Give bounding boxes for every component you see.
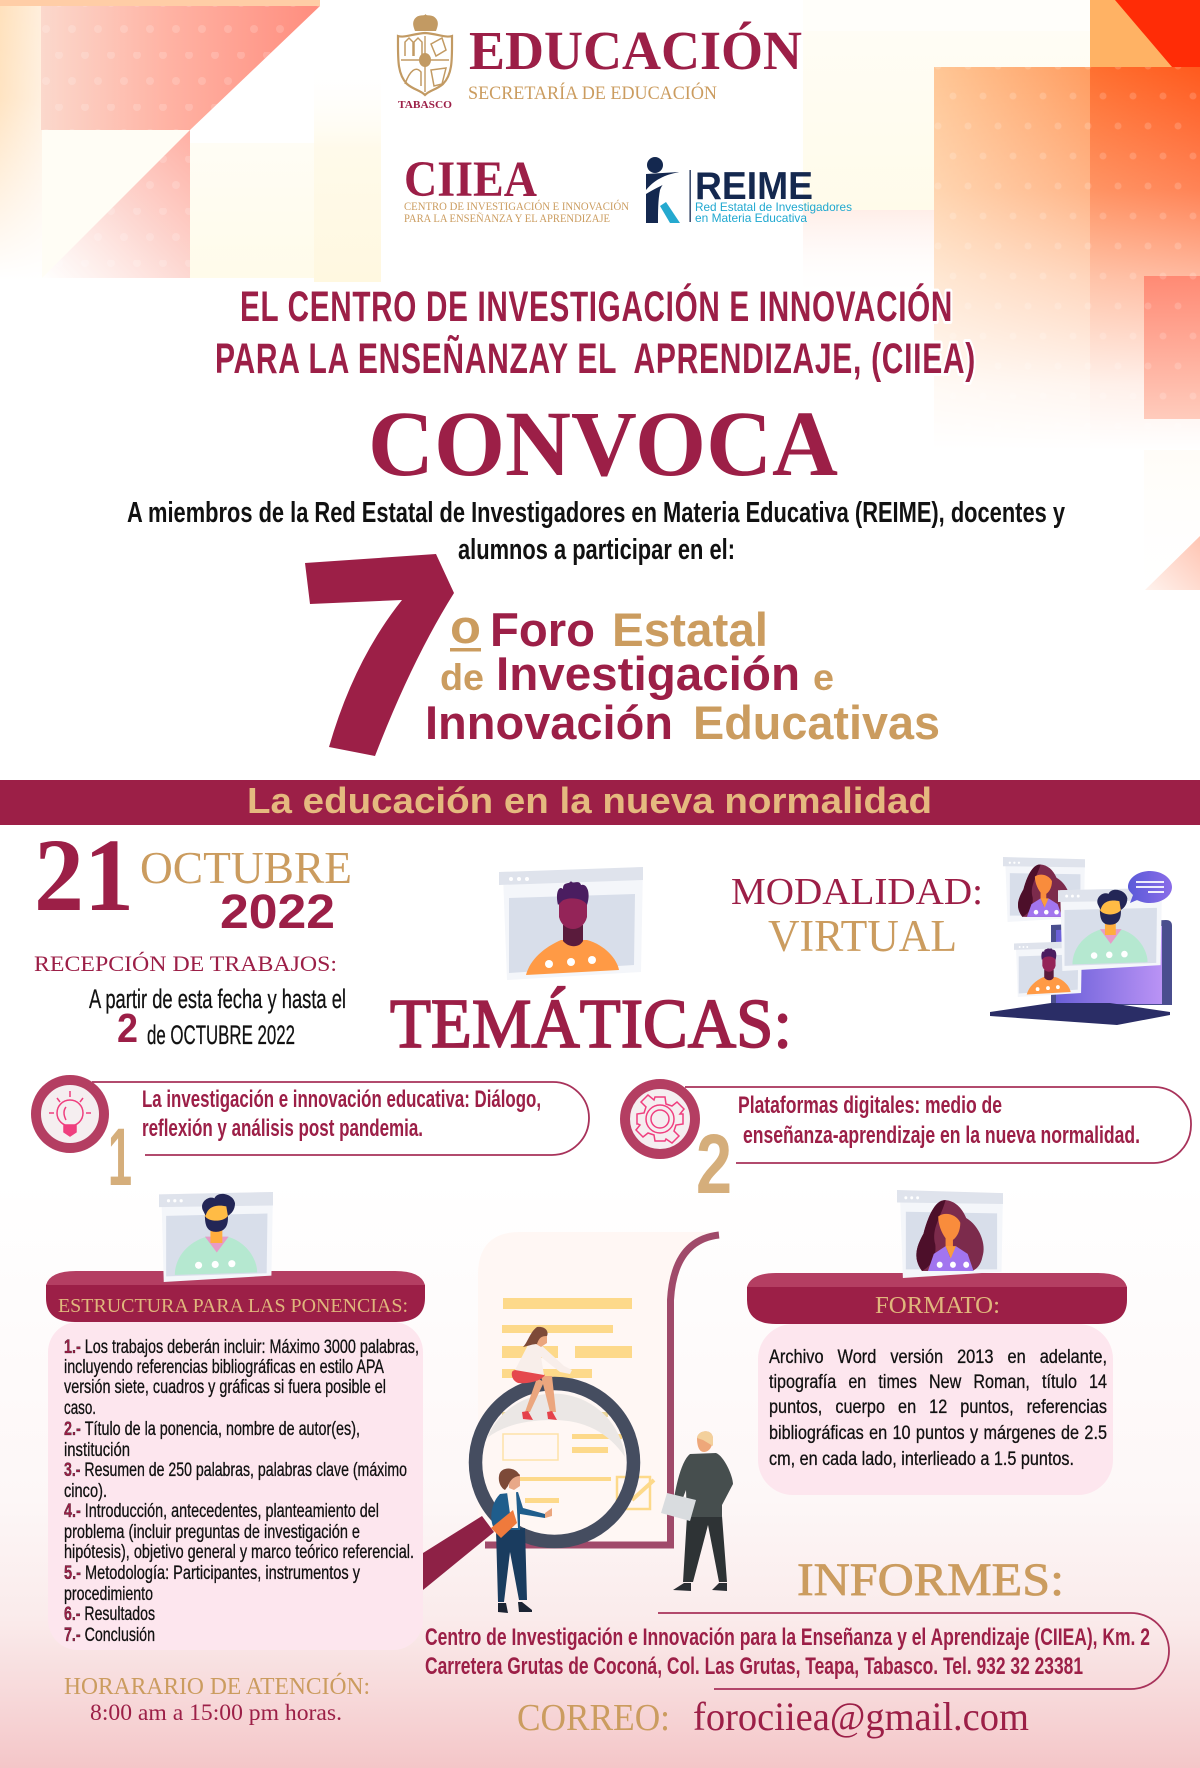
date block [34,818,352,939]
person window above structure banner [159,1192,273,1282]
modality: VIRTUAL [768,911,957,961]
panel: structure list: 7.- Conclusión [64,1625,155,1646]
panel: structure list: problema (incluir preguntas de investigación e [64,1522,360,1543]
topic 1: reflexión y análisis post pandemia. [142,1115,423,1142]
panel: structure list: cinco). [64,1481,107,1502]
topic 2 [625,1084,1191,1211]
big numeral 7 [305,554,454,756]
forum title: Educativas [693,696,940,749]
submission period [34,951,346,1051]
forum title: de [440,657,484,698]
topic 1: La investigación e innovación educativa: Diálogo, [142,1086,541,1113]
date block: OCTUBRE [140,843,352,893]
logo subtitle: SECRETARÍA DE EDUCACIÓN [468,82,717,104]
magnifier lens [476,1384,634,1542]
email [517,1694,1029,1739]
logo: Tabasco crest: TABASCO [398,100,452,111]
theme banner [0,780,1200,825]
title: CONVOCA: CONVOCA [368,393,838,496]
logo: CIIEA: CIIEA [404,152,537,208]
modality [731,871,983,961]
date block: 21 [34,818,134,933]
person: woman sitting [512,1327,572,1420]
document [478,1232,719,1545]
office hours [64,1673,370,1725]
logo: REIME: Red Estatal de Investigadores [695,200,852,214]
invitation text: alumnos a participar en el: [458,534,735,566]
office hours: HORARARIO DE ATENCIÓN: [64,1673,370,1700]
theme banner: La educación en la nueva normalidad [247,780,932,821]
topic 2: 2 [696,1117,732,1211]
illustration: laptop with video call [990,857,1172,1025]
panel: structure list: caso. [64,1398,96,1419]
topic 1 [36,1080,589,1203]
forum title: Foro [490,603,595,656]
icon: gear [636,1095,684,1143]
submission period: de OCTUBRE 2022 [147,1020,295,1050]
logo: CIIEA [404,152,630,225]
banner: structure [46,1271,425,1322]
submission period: RECEPCIÓN DE TRABAJOS: [34,951,337,976]
heading: INFORMES: INFORMES: [797,1554,1064,1606]
panel: format text: puntos, cuerpo en 12 puntos, referencias [769,1397,1107,1418]
banner: structure: ESTRUCTURA PARA LAS PONENCIAS: [58,1295,408,1317]
panel: structure list: institución [64,1440,130,1461]
panel: structure list: 3.- Resumen de 250 palabras, palabras clave (máximo [64,1460,407,1481]
person window above format banner [897,1190,1003,1278]
forum title: Investigación [496,647,800,700]
logo: REIME: en Materia Educativa [695,211,807,225]
panel: structure list: incluyendo referencias bibliográficas en estilo APA [64,1357,384,1378]
panel: structure list: 4.- Introducción, antecedentes, planteamiento del [64,1501,379,1522]
magnifier handle [423,1516,494,1590]
logo: REIME [646,157,852,225]
modality: MODALIDAD: [731,871,983,913]
heading: TEMÁTICAS: TEMÁTICAS: [390,986,792,1063]
panel: format text: tipografía en times New Roman, título 14 [769,1372,1107,1393]
decorative top-right geometric blocks [803,0,1200,609]
logo: REIME: REIME [695,165,813,208]
forum title: Estatal [612,603,768,656]
panel: structure list: 5.- Metodología: Participantes, instrumentos y [64,1563,360,1584]
invitation text [127,497,1065,566]
logo: EDUCACIÓN: EDUCACIÓN [469,20,802,81]
panel: format text [758,1324,1113,1495]
illustration: person in video window [499,867,643,980]
panel: format text: Archivo Word versión 2013 en adelante, [769,1347,1107,1368]
submission period: A partir de esta fecha y hasta el [89,984,346,1014]
panel: structure list: versión siete, cuadros y gráficas si fuera posible el [64,1377,386,1398]
email: CORREO: [517,1697,670,1739]
panel: structure list: 6.- Resultados [64,1604,155,1625]
person: man with papers [661,1431,733,1591]
panel: structure list: 2.- Título de la ponencia, nombre de autor(es), [64,1419,360,1440]
logo: Tabasco crest [398,14,452,111]
heading: convening institution [215,282,976,383]
panel: structure list [48,1322,423,1650]
panel: format text: cm, en cada lado, interlieado a 1.5 puntos. [769,1449,1074,1470]
logo: CIIEA: PARA LA ENSEÑANZA Y EL APRENDIZAJE [404,211,610,225]
panel: structure list: hipótesis), objetivo general y marco teórico referencial. [64,1542,414,1563]
submission period: 2 [117,1005,138,1051]
panel: structure list: procedimiento [64,1584,153,1605]
topic 2: Plataformas digitales: medio de [738,1092,1002,1119]
topic 1: 1 [108,1112,132,1203]
email: forociiea@gmail.com [693,1694,1029,1739]
date block: 2022 [220,886,335,939]
central illustration: document, magnifier and people [423,1232,733,1613]
panel: structure list: 1.- Los trabajos deberán incluir: Máximo 3000 palabras, [64,1337,419,1358]
banner: format [747,1273,1127,1324]
forum title: Innovación [425,696,673,749]
office hours: 8:00 am a 15:00 pm horas. [90,1700,342,1725]
panel: format text: bibliográficas en 10 puntos y márgenes de 2.5 [769,1423,1107,1444]
person: woman with folder [491,1468,552,1613]
icon: lightbulb [49,1091,91,1136]
banner: format: FORMATO: [875,1293,1000,1319]
logo: CIIEA: CENTRO DE INVESTIGACIÓN E INNOVACIÓN [404,199,630,213]
decorative top-left geometric blocks [0,0,381,282]
forum title: o [450,600,481,653]
forum title [425,600,940,749]
forum title: e [813,657,834,698]
contact pill [425,1613,1169,1689]
